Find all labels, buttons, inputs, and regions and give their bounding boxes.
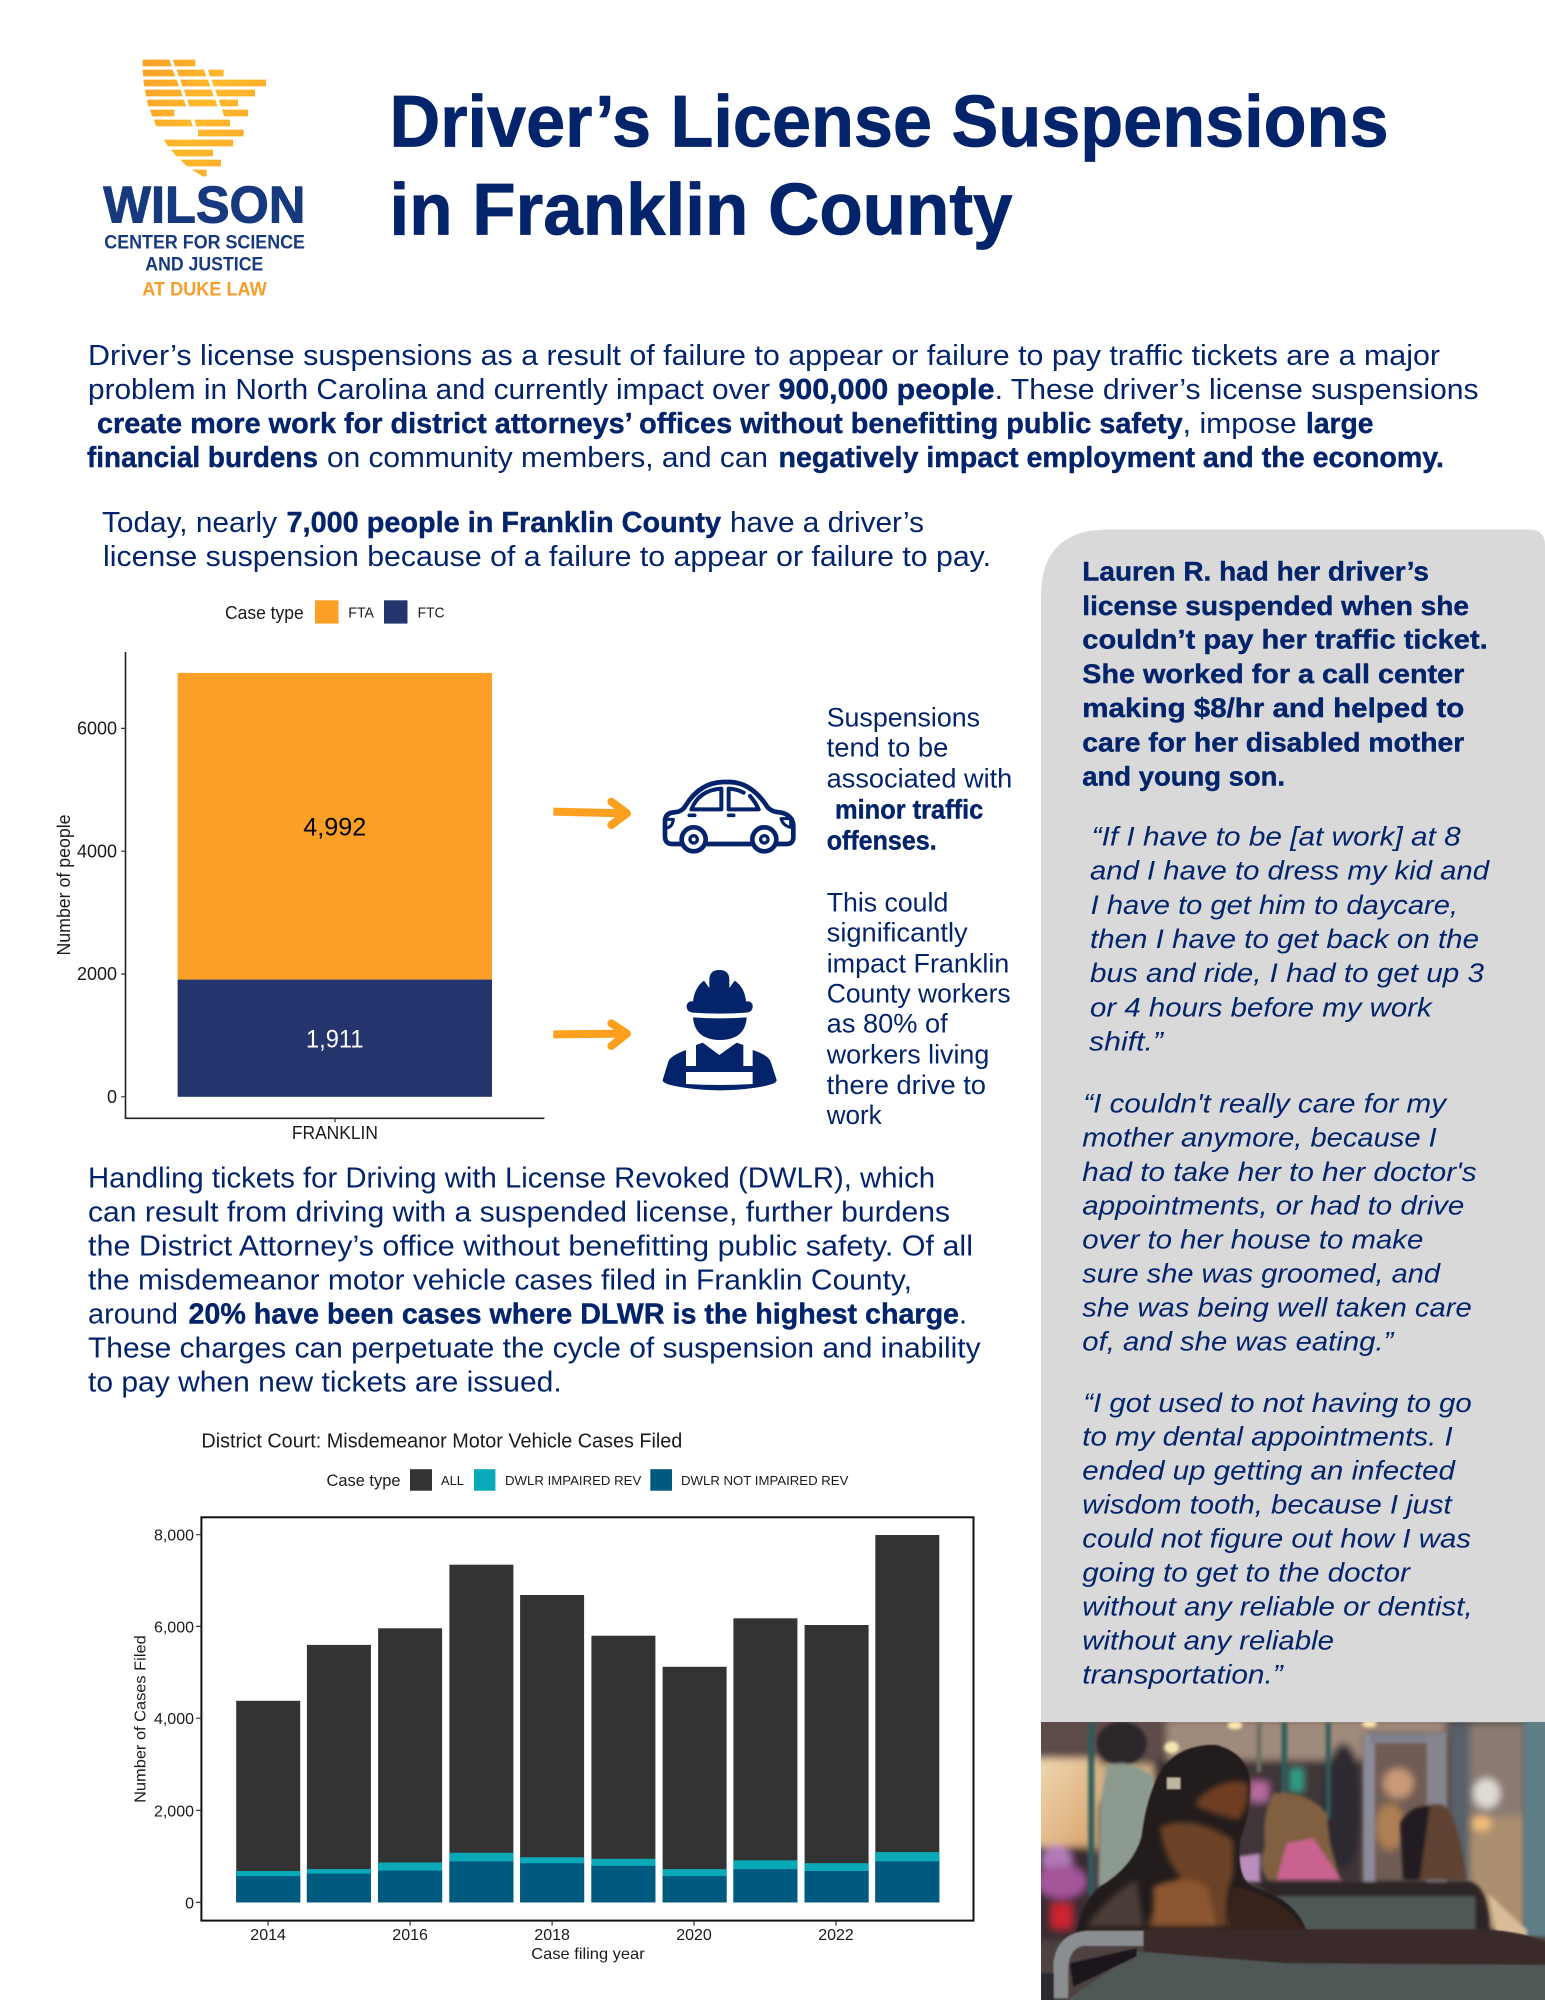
woman — [1077, 1745, 1307, 1932]
icon: car — [665, 782, 793, 851]
photo: woman riding a bus — [1033, 1717, 1545, 2000]
chart legend: case type: FTC — [418, 605, 445, 621]
chart legend: case type — [326, 1469, 849, 1491]
quote 1: or 4 hours before my work — [1090, 992, 1433, 1022]
plot frame and axes: Case filing year — [531, 1946, 645, 1963]
paragraph: DWLR cases: to pay when new tickets are issued. — [88, 1366, 562, 1398]
story introduction: She worked for a call center — [1082, 659, 1465, 689]
callout: workers impact: workers living — [826, 1039, 989, 1069]
story introduction: couldn’t pay her traffic ticket. — [1082, 625, 1488, 655]
intro paragraph: . These driver’s license suspensions — [995, 374, 1479, 406]
bars: DWLR not impaired revocation — [236, 1861, 939, 1902]
quote 3: to my dental appointments. I — [1082, 1422, 1453, 1452]
chart legend: case type: Case type — [225, 603, 304, 623]
statement: 7,000 people in Franklin County — [102, 507, 991, 573]
bar segment: FTC 1,911 — [178, 980, 492, 1097]
paragraph: DWLR cases: can result from driving with a suspended license, further burdens — [88, 1196, 950, 1228]
intro paragraph: , impose — [1183, 408, 1297, 440]
callout: workers impact: impact Franklin — [827, 949, 1009, 979]
title: Driver’s License Suspensions — [390, 82, 1388, 163]
chart axes: Number of people — [54, 814, 74, 956]
callout: minor traffic offenses: offenses. — [827, 825, 937, 855]
intro paragraph — [87, 340, 1479, 474]
quote 3: without any reliable or dentist, — [1082, 1592, 1473, 1622]
chart axes: 4000 — [77, 841, 117, 861]
chart axes: 6000 — [77, 719, 117, 739]
quote 3: “I got used to not having to go — [1083, 1388, 1472, 1418]
title: in Franklin County — [390, 170, 1013, 251]
bar segment: FTC 1,911: 1,911 — [306, 1026, 364, 1054]
arrow: to car — [553, 802, 627, 825]
plot frame and axes: 6,000 — [154, 1619, 194, 1636]
paragraph: DWLR cases — [88, 1162, 981, 1398]
quote 1: bus and ride, I had to get up 3 — [1090, 958, 1484, 988]
intro paragraph: create more work for district attorneys’ offices without benefitting public safety — [97, 408, 1183, 440]
quote 3: wisdom tooth, because I just — [1082, 1490, 1453, 1520]
quote 1: shift.” — [1089, 1026, 1164, 1056]
chart axes — [54, 652, 544, 1143]
bars: DWLR impaired revocation — [236, 1852, 939, 1902]
intro paragraph: Driver’s license suspensions as a result of failure to appear or failure to pay traffic tickets are a major — [88, 340, 1440, 372]
icon: construction worker — [663, 970, 777, 1090]
paragraph: DWLR cases: Handling tickets for Driving with License Revoked (DWLR), which — [88, 1162, 935, 1194]
paragraph: DWLR cases: the misdemeanor motor vehicle cases filed in Franklin County, — [88, 1264, 912, 1296]
logo: Wilson Center for Science and Justice: AT DUKE LAW — [142, 280, 267, 301]
quote 2: had to take her to her doctor's — [1082, 1157, 1477, 1187]
bar chart: suspensions by case type — [54, 600, 544, 1143]
logo: Wilson Center for Science and Justice: WILSON — [103, 177, 305, 235]
quote 1 — [1089, 822, 1490, 1056]
statement: 7,000 people in Franklin County: license suspension because of a failure to appear or failure to pay. — [103, 541, 991, 573]
plot frame and axes: 2,000 — [154, 1803, 194, 1820]
story introduction: Lauren R. had her driver’s — [1082, 557, 1429, 587]
chart legend: case type: Case type — [326, 1471, 400, 1490]
intro paragraph: negatively impact employment and the economy. — [778, 442, 1444, 474]
chart axes: 2000 — [77, 964, 117, 984]
plot frame and axes: 2014 — [250, 1927, 286, 1944]
intro paragraph: financial burdens — [87, 442, 318, 474]
plot frame and axes: 2020 — [676, 1927, 712, 1944]
chart legend: case type: DWLR NOT IMPAIRED REV — [681, 1473, 849, 1488]
quote 2: mother anymore, because I — [1082, 1122, 1437, 1152]
quote 2: appointments, or had to drive — [1082, 1191, 1464, 1221]
hair highlights — [1087, 1781, 1249, 1927]
bar chart: misdemeanor motor vehicle cases filed — [132, 1431, 974, 1963]
callout: workers impact: County workers — [827, 979, 1011, 1009]
bus seats — [1041, 1929, 1545, 2000]
statement: 7,000 people in Franklin County: Today, nearly — [102, 507, 278, 539]
statement: 7,000 people in Franklin County: have a driver’s — [730, 507, 924, 539]
quote 3: could not figure out how I was — [1082, 1523, 1471, 1553]
quote 2: “I couldn't really care for my — [1083, 1089, 1448, 1119]
logo: Wilson Center for Science and Justice: CENTER FOR SCIENCE — [104, 233, 305, 254]
quote 3: ended up getting an infected — [1082, 1456, 1456, 1486]
hair clip — [1167, 1777, 1181, 1789]
quote 3: transportation.” — [1082, 1659, 1284, 1689]
chart title: District Court: Misdemeanor Motor Vehicle Cases Filed — [201, 1431, 682, 1453]
plot frame and axes: Number of Cases Filed — [132, 1635, 149, 1803]
quote 2: over to her house to make — [1082, 1225, 1423, 1255]
intro paragraph: on community members, and can — [327, 442, 768, 474]
plot frame and axes: 8,000 — [154, 1528, 194, 1545]
quote 2: sure she was groomed, and — [1082, 1258, 1441, 1288]
icon: logo striped shield — [143, 60, 266, 176]
paragraph: DWLR cases: around — [88, 1298, 178, 1330]
plot frame and axes: 0 — [185, 1895, 194, 1912]
chart legend: case type: ALL — [441, 1473, 464, 1488]
paragraph: DWLR cases: 20% have been cases where DLWR is the highest charge — [188, 1298, 959, 1330]
callout: workers impact: work — [826, 1100, 882, 1130]
chart axes: 0 — [107, 1087, 117, 1107]
quote 3 — [1082, 1388, 1473, 1689]
intro paragraph: 900,000 people — [778, 374, 994, 406]
callout: minor traffic offenses: tend to be — [827, 733, 948, 763]
panel: Lauren R. story — [1041, 530, 1545, 1723]
plot frame and axes: 2018 — [534, 1927, 570, 1944]
statement: 7,000 people in Franklin County: 7,000 people in Franklin County — [286, 507, 721, 539]
story introduction — [1082, 557, 1488, 792]
logo: Wilson Center for Science and Justice: AND JUSTICE — [145, 255, 263, 276]
quote 1: “If I have to be [at work] at 8 — [1092, 822, 1461, 852]
paragraph: DWLR cases: the District Attorney’s office without benefitting public safety. Of all — [88, 1230, 973, 1262]
quote 3: without any reliable — [1082, 1625, 1334, 1655]
callout: workers impact: significantly — [827, 918, 968, 948]
story introduction: care for her disabled mother — [1082, 727, 1465, 757]
callout: minor traffic offenses: minor traffic — [835, 795, 983, 825]
title — [390, 82, 1388, 251]
chart legend: case type: DWLR IMPAIRED REV — [505, 1473, 642, 1488]
callout: workers impact: as 80% of — [827, 1009, 948, 1039]
logo: Wilson Center for Science and Justice — [103, 60, 305, 301]
quote 1: then I have to get back on the — [1090, 924, 1479, 954]
arrow: to worker — [553, 1023, 627, 1046]
panel background — [1041, 530, 1545, 1723]
quote 2 — [1082, 1089, 1477, 1357]
story introduction: license suspended when she — [1082, 591, 1469, 621]
chart legend: case type: FTA — [348, 605, 374, 621]
plot frame and axes: 2022 — [818, 1927, 854, 1944]
bar segment: FTA 4,992 — [178, 673, 492, 980]
quote 1: and I have to dress my kid and — [1090, 856, 1490, 886]
intro paragraph: problem in North Carolina and currently impact over — [88, 374, 770, 406]
chart axes: FRANKLIN — [292, 1123, 378, 1143]
callout: minor traffic offenses: Suspensions — [827, 703, 980, 733]
callout: workers impact: This could — [827, 888, 948, 918]
paragraph: DWLR cases: These charges can perpetuate the cycle of suspension and inability — [88, 1332, 981, 1364]
callout: minor traffic offenses — [827, 703, 1012, 855]
quote 2: of, and she was eating.” — [1082, 1327, 1394, 1357]
quote 1: I have to get him to daycare, — [1091, 890, 1458, 920]
story introduction: making $8/hr and helped to — [1082, 693, 1464, 723]
chart legend: case type — [225, 600, 445, 624]
intro paragraph: large — [1306, 408, 1374, 440]
quote 2: she was being well taken care — [1082, 1293, 1472, 1323]
paragraph: DWLR cases: . — [959, 1298, 967, 1330]
quote 3: going to get to the doctor — [1082, 1558, 1411, 1588]
callout: workers impact — [826, 888, 1011, 1130]
bar segment: FTA 4,992: 4,992 — [303, 813, 366, 841]
plot frame and axes: 4,000 — [154, 1711, 194, 1728]
bars: ALL cases — [236, 1535, 939, 1902]
callout: workers impact: there drive to — [827, 1070, 986, 1100]
plot frame and axes — [132, 1517, 974, 1963]
story introduction: and young son. — [1082, 762, 1285, 792]
callout: minor traffic offenses: associated with — [827, 764, 1012, 794]
plot frame and axes: 2016 — [392, 1927, 428, 1944]
